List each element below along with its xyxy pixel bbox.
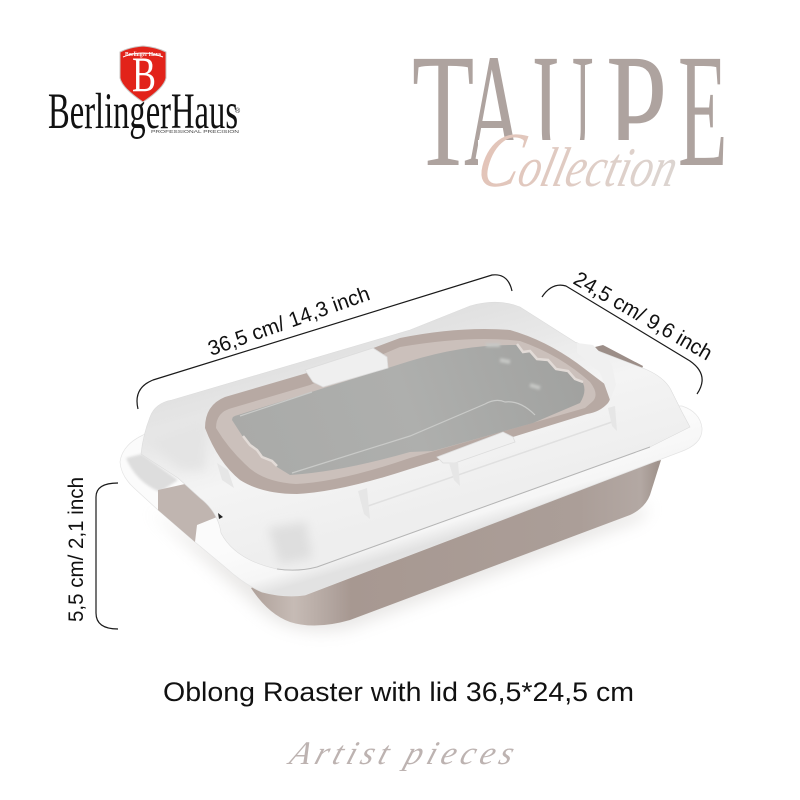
title: TAUPE <box>412 21 727 201</box>
product drop shadow <box>150 505 650 631</box>
glass reflection lines <box>240 392 535 473</box>
dimension bracket: height <box>96 483 118 629</box>
rear right latch <box>577 343 616 400</box>
registered mark: ® <box>235 107 241 115</box>
lid front crease line <box>368 422 612 506</box>
tagline: Artist pieces: Artist pieces <box>284 736 519 772</box>
title letter P: P <box>606 21 667 200</box>
clear lid <box>141 302 690 570</box>
dimension label: length: 36,5 cm/ 14,3 inch <box>205 282 373 361</box>
gasket ring <box>205 329 611 494</box>
subtitle: Collection: Collection <box>470 117 689 204</box>
logo wordmark: BerlingerHaus <box>48 84 238 140</box>
dimension bracket: width <box>542 285 702 394</box>
rear taupe handle <box>595 345 643 374</box>
front right latch <box>437 432 515 463</box>
logo tagline: PROFESSIONAL PRECISION <box>151 129 239 134</box>
product: roaster with lid <box>120 302 702 631</box>
title letter E: E <box>678 21 727 200</box>
left taupe handle <box>158 484 222 542</box>
lid left side shading <box>146 420 205 470</box>
gasket pale inner band <box>216 339 596 484</box>
title letter A: A <box>464 21 525 200</box>
title letter U: U <box>533 21 594 200</box>
pan rim <box>120 400 702 596</box>
rim left shading <box>126 454 178 492</box>
logo: Berlinger Haus <box>48 46 241 140</box>
dimension label: height: 5,5 cm/ 2,1 inch <box>65 477 88 622</box>
caption: Oblong Roaster with lid 36,5*24,5 cm <box>163 677 634 707</box>
icon: red shield: B <box>132 46 156 102</box>
icon: red shield: Berlinger Haus <box>125 52 162 58</box>
dimension label: width: 24,5 cm/ 9,6 inch <box>570 267 716 365</box>
dimension bracket: length <box>137 275 512 409</box>
glass highlight spots <box>486 345 540 388</box>
title letter T: T <box>412 21 474 201</box>
lid corner shading <box>268 522 312 564</box>
glass window <box>232 345 584 475</box>
rear left latch <box>305 348 388 387</box>
lid latch fins <box>217 406 617 519</box>
roaster pan body <box>251 460 661 626</box>
gasket scallop highlights <box>243 344 583 466</box>
lid base step line <box>277 447 650 570</box>
handle joint <box>218 513 223 519</box>
